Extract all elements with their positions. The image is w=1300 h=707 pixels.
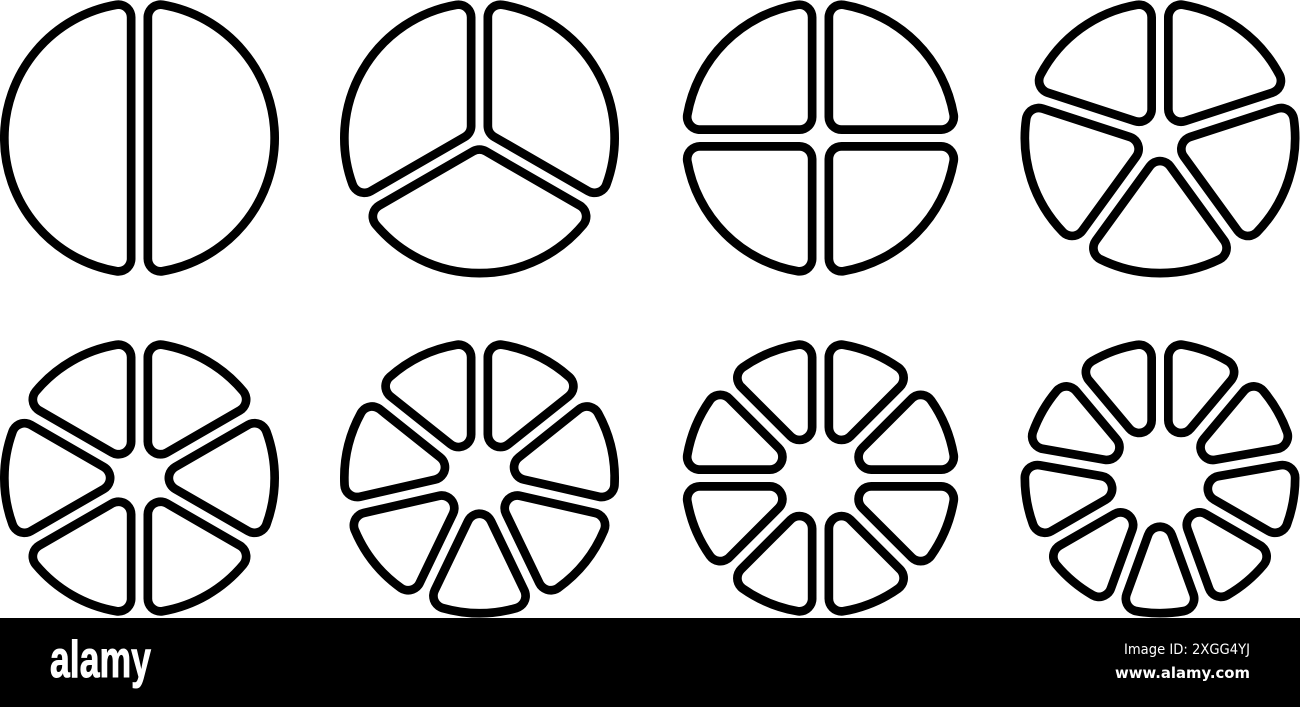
image id: Image ID: 2XGG4YJ <box>1124 642 1250 658</box>
pie outline: 9 segments <box>1036 356 1284 600</box>
pie outline: 3 segments <box>326 0 633 260</box>
pie outline: 2 segments <box>17 17 262 259</box>
pie outline: 8 segments <box>697 355 944 601</box>
pie outline: 5 segments <box>1027 7 1293 260</box>
website: www.alamy.com <box>1115 664 1250 682</box>
pie outline: 4 segments <box>684 2 957 274</box>
logo wordmark: alamy <box>50 631 151 689</box>
pie outline: 6 segments <box>17 351 262 605</box>
footer bar <box>0 618 1300 707</box>
pie outline: 7 segments <box>353 353 606 601</box>
